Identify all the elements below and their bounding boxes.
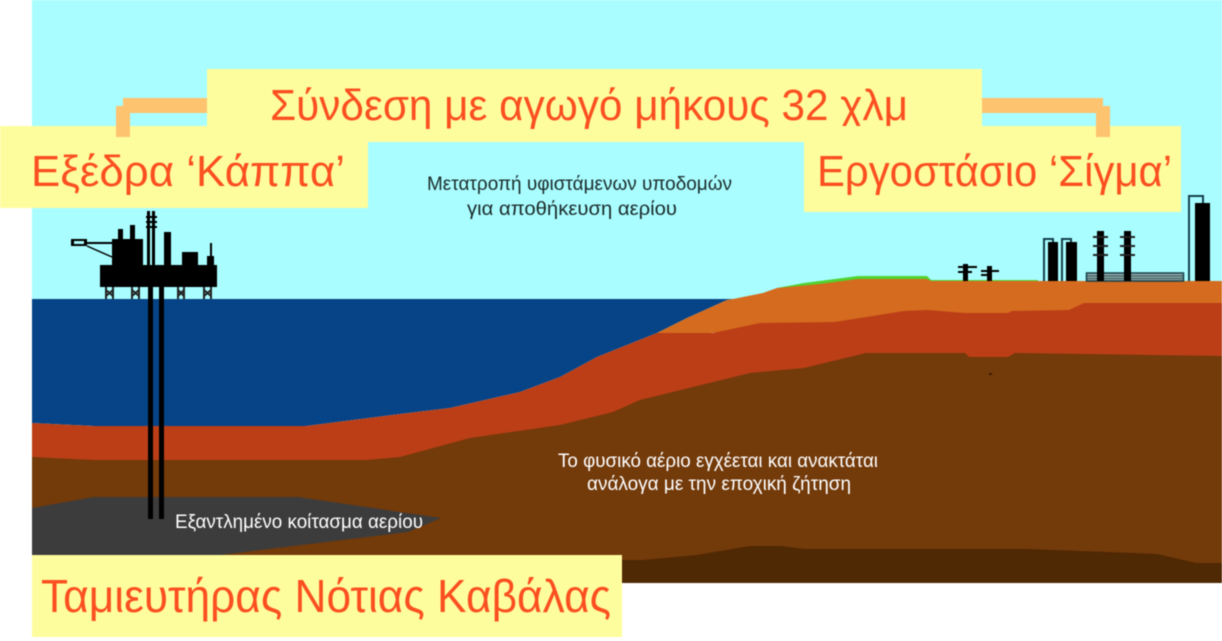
modules: [112, 239, 143, 265]
panel: Kappa platform: [0, 126, 368, 208]
onshore plant Sigma: [958, 196, 1210, 281]
heading: pipeline: Σύνδεση με αγωγό μήκους 32 χλμ: [270, 81, 908, 130]
red rock layer: [32, 303, 1222, 460]
offshore platform Kappa: [71, 211, 217, 519]
geological cross-section: [32, 276, 1222, 583]
note: infrastructure conversion: [427, 174, 732, 220]
depleted gas reservoir: [32, 497, 441, 555]
note: seasonal demand: [558, 451, 878, 495]
note: infrastructure conversion: για αποθήκευση αερίου: [467, 199, 677, 220]
note: infrastructure conversion: Μετατροπή υφιστάμενων υποδομών: [427, 174, 732, 195]
drill pipes: [148, 287, 164, 519]
label: Sigma: Εργοστάσιο ‘Σίγμα’: [817, 147, 1172, 196]
sea: [32, 299, 735, 426]
note: seasonal demand: Το φυσικό αέριο εγχέεται και ανακτάται: [558, 451, 878, 472]
label: reservoir: Ταμιευτήρας Νότιας Καβάλας: [41, 570, 611, 622]
platform legs: [106, 287, 211, 299]
deck: [100, 265, 217, 287]
derrick: [146, 211, 157, 265]
brown rock base layer: [32, 345, 1222, 583]
green ground strip: [777, 276, 1038, 291]
storage tanks: [1044, 239, 1077, 281]
note: seasonal demand: ανάλογα με την εποχική ζήτηση: [587, 474, 851, 495]
dark deep rock layer: [32, 546, 1222, 583]
tall stack: [1189, 196, 1210, 281]
panel: South Kavala reservoir: [32, 555, 622, 637]
orange upper rock layer: [655, 279, 1222, 336]
panel: pipeline heading: [207, 69, 982, 142]
crane boom: [71, 239, 112, 257]
sky background: [32, 0, 1222, 300]
label: Kappa: Εξέδρα ‘Κάππα’: [31, 147, 345, 196]
low building: [1086, 273, 1184, 281]
connector drop left: [116, 106, 130, 137]
panel: Sigma plant: [804, 126, 1181, 212]
note: depleted gas field: Εξαντλημένο κοίτασμα αερίου: [175, 512, 423, 533]
speck: [989, 373, 992, 375]
well heads: [958, 264, 999, 281]
connector drop right: [1096, 106, 1110, 137]
pipeline connector left: [123, 98, 207, 113]
towers: [1093, 231, 1135, 281]
pipeline connector right: [981, 98, 1103, 113]
